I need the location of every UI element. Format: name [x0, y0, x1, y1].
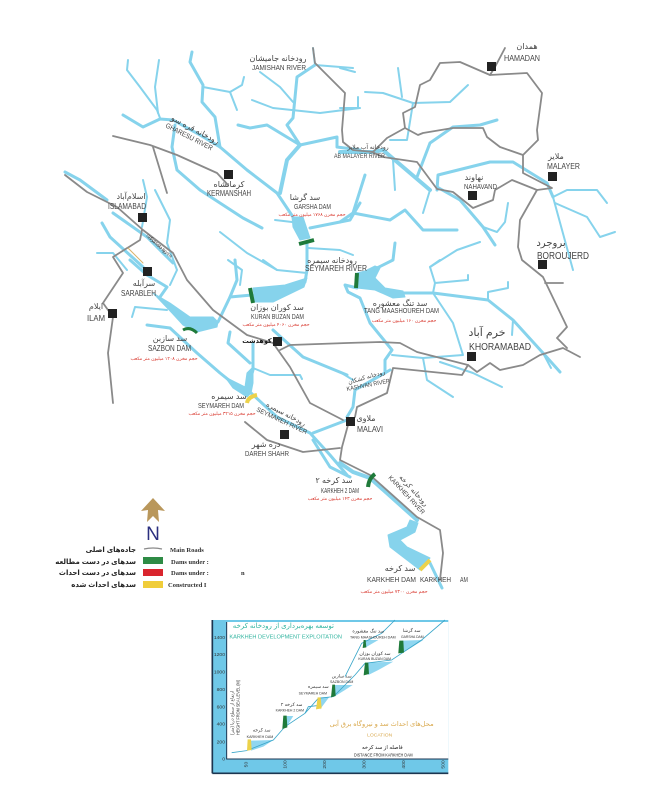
map: dam labels: سد سیمره: [211, 392, 247, 401]
chart: dam labels: سد سیمره: [308, 684, 329, 689]
chart: axis labels: 300: [362, 760, 368, 769]
chart: dam labels: سد گرشا: [403, 627, 421, 633]
legend: جاده‌های اصلی: [86, 547, 136, 554]
chart: titles: توسعه بهره‌برداری از رودخانه کرخه: [233, 622, 334, 630]
map: city labels: خرم آباد: [468, 325, 506, 339]
map: river labels: رودخانه مرگ: [147, 235, 169, 255]
chart: dam labels: GARSHA DAM: [401, 634, 424, 639]
map: city labels: کرمانشاه: [214, 180, 245, 189]
map: city labels: KHORAMABAD: [469, 342, 531, 353]
map: river labels: رودخانه قره سو: [169, 113, 221, 146]
north arrow: [141, 498, 165, 545]
map: city labels: MALAYER: [547, 162, 580, 171]
map: river labels: رودخانه سیمره: [265, 401, 307, 428]
chart: axis labels: [214, 635, 446, 769]
map: city labels: NAHAVAND: [464, 184, 497, 191]
chart: axis labels: 100: [282, 760, 288, 769]
map: city labels: [87, 42, 589, 458]
chart: axis labels: HEIGHT FROM SEA LEVEL (M): [236, 680, 241, 735]
map: dam labels: SAZBON DAM: [148, 344, 191, 353]
chart: river profile lines: [232, 620, 445, 753]
map: reservoirs: [153, 217, 430, 570]
map: dam labels: حجم مخزن ۱۷۶۸ میلیون متر مکعب: [278, 212, 346, 218]
chart: dam labels: TANG MAASHOUREH DAM: [350, 635, 396, 640]
legend: n: [241, 570, 245, 577]
map: city labels: BOROUJERD: [537, 251, 589, 262]
chart: dam labels: سد تنگ معشوره: [352, 629, 384, 634]
chart: axis labels: 0: [222, 757, 225, 763]
legend: سدهای در دست احداث: [59, 570, 136, 577]
map: river labels: JAMISHAN RIVER: [252, 63, 306, 72]
map: dam labels: GARSHA DAM: [294, 204, 331, 211]
map: river labels: GHARESU RIVER: [145, 233, 173, 259]
chart: dam labels: SAZBON DAM: [330, 679, 353, 684]
map: dam labels: [130, 192, 468, 595]
chart: axis labels: 800: [217, 687, 225, 693]
legend: Main Roads: [170, 547, 204, 554]
chart: axis labels: 1000: [214, 669, 225, 675]
map: city labels: HAMADAN: [504, 54, 540, 63]
map: city labels: کوهدشت: [242, 338, 272, 345]
chart: dam labels: سد کرخه ۲: [281, 702, 303, 707]
chart: dam labels: سد سازبن: [332, 674, 352, 679]
chart: titles: LOCATION: [367, 733, 393, 739]
map: dam labels: SEYMAREH DAM: [198, 403, 244, 410]
chart: titles: فاصله از سد کرخه: [362, 744, 403, 751]
chart: reservoir wedges: [251, 640, 423, 751]
legend: [55, 547, 245, 589]
map: dam labels: KARKHEH: [420, 577, 451, 584]
map: main roads: [65, 48, 580, 580]
map: dam labels: سد سازبن: [153, 334, 188, 343]
map: river labels: KASHVAN RIVER: [346, 379, 391, 393]
map: city labels: دره شهر: [251, 440, 281, 449]
map: dam labels: سد کوران بوزان: [250, 303, 304, 312]
map: river network: [65, 48, 615, 588]
chart: axis labels: 600: [217, 704, 225, 710]
map: city labels: ILAM: [87, 314, 105, 323]
map: river labels: رودخانه آب ملایر: [346, 142, 389, 151]
map: dam labels: سد تنگ معشوره: [373, 298, 428, 308]
map: city labels: ISLAMABAD: [108, 202, 146, 211]
chart: titles: KARKHEH DEVELOPMENT EXPLOITATION: [229, 634, 342, 640]
chart: dam bars: [247, 640, 404, 751]
chart: titles: DISTANCE FROM KARKHEH DAM: [354, 753, 413, 758]
map: dam labels: KURAN BUZAN DAM: [251, 314, 304, 321]
map: dam labels: AM: [460, 577, 468, 584]
map: dam labels: حجم مخزن ۴۰۶۰ میلیون متر مکعب: [242, 322, 310, 328]
map: dam labels: سد کرخه ۲: [315, 476, 353, 485]
map: river labels: AB MALAYER RIVER: [334, 154, 386, 160]
map: dam labels: سد کرخه: [385, 564, 416, 573]
map: dam labels: حجم مخزن ۱۶۰ میلیون متر مکعب: [372, 318, 436, 324]
chart frame: [212, 620, 448, 773]
chart: dam labels: [247, 627, 424, 739]
map: river labels: SEYMAREH RIVER: [255, 406, 308, 436]
chart: axis labels: 1200: [214, 652, 225, 658]
map: city markers: [108, 62, 557, 439]
chart: dam labels: KARKHEH 2 DAM: [276, 708, 304, 713]
map: city labels: ملایر: [547, 152, 564, 161]
map: dam markers: [183, 240, 430, 570]
legend: Dams under :: [171, 559, 209, 566]
chart: axis labels: 1400: [214, 635, 225, 641]
map: city labels: KERMANSHAH: [207, 189, 251, 198]
map: dam labels: حجم مخزن ۷۳۰۰ میلیون متر مکعب: [360, 589, 428, 595]
chart: axis labels: 200: [322, 760, 328, 769]
map: dam labels: KARKHEH DAM: [367, 577, 416, 584]
chart: axis labels: 500: [440, 760, 446, 769]
map: river labels: SEYMAREH RIVER: [305, 264, 367, 273]
north arrow: N: [146, 524, 160, 545]
map: city labels: ملاوی: [356, 414, 376, 423]
chart: dam labels: سد کرخه: [253, 728, 271, 733]
legend: سدهای در دست مطالعه: [55, 559, 136, 566]
map: dam labels: TANG MAASHOUREH DAM: [364, 308, 439, 315]
map: river labels: [145, 54, 430, 516]
chart: axis labels: 400: [217, 722, 225, 728]
map: city labels: ایلام: [89, 302, 103, 311]
map: river labels: رودخانه کشکان: [347, 369, 386, 386]
map: city labels: بروجرد: [536, 238, 566, 249]
chart: dam labels: KURAN BUZAN DAM: [358, 656, 391, 661]
map: city labels: اسلام‌آباد: [116, 191, 146, 201]
legend: سدهای احداث شده: [71, 582, 136, 589]
map: dam labels: سد گرشا: [290, 192, 321, 202]
chart: Karkheh development profile: [212, 620, 448, 773]
map: dam labels: KARKHEH 2 DAM: [321, 488, 359, 495]
chart: dam labels: سد کوران بوزان: [359, 651, 391, 656]
legend: Constructed I: [168, 582, 207, 589]
chart: axis labels: 50: [243, 762, 249, 767]
map: river labels: رودخانه کرخه: [397, 473, 430, 508]
chart: axis labels: ارتفاع از سطح دریا (متر): [230, 691, 235, 735]
map: dam labels: حجم مخزن ۳۲۱۵ میلیون متر مکعب: [188, 411, 256, 417]
map: river labels: GHARESU RIVER: [164, 123, 214, 152]
map: dam labels: حجم مخزن ۱۲۰۸ میلیون متر مکعب: [130, 356, 198, 362]
map: river labels: KARKHEH RIVER: [387, 475, 426, 516]
map: city labels: سرآبله: [133, 278, 156, 288]
map: city labels: SARABLEH: [121, 289, 156, 298]
map: city labels: نهاوند: [465, 173, 483, 182]
chart: dam labels: SEYMAREH DAM: [299, 690, 327, 695]
map: city labels: DAREH SHAHR: [245, 451, 289, 458]
map: city labels: MALAVI: [357, 425, 383, 434]
chart: axis labels: 200: [217, 739, 225, 745]
chart: dam labels: KARKHEH DAM: [247, 734, 273, 739]
map: city labels: همدان: [516, 42, 538, 51]
map: river labels: رودخانه سیمره: [307, 256, 357, 265]
map: river labels: رودخانه جامیشان: [250, 54, 307, 63]
chart: titles: [229, 622, 434, 758]
chart: titles: محل‌های احداث سد و نیروگاه برق آبی: [330, 719, 434, 728]
legend: Dams under :: [171, 570, 209, 577]
chart: axis labels: 400: [401, 760, 407, 769]
map: dam labels: حجم مخزن ۱۴۳ میلیون متر مکعب: [308, 496, 372, 502]
